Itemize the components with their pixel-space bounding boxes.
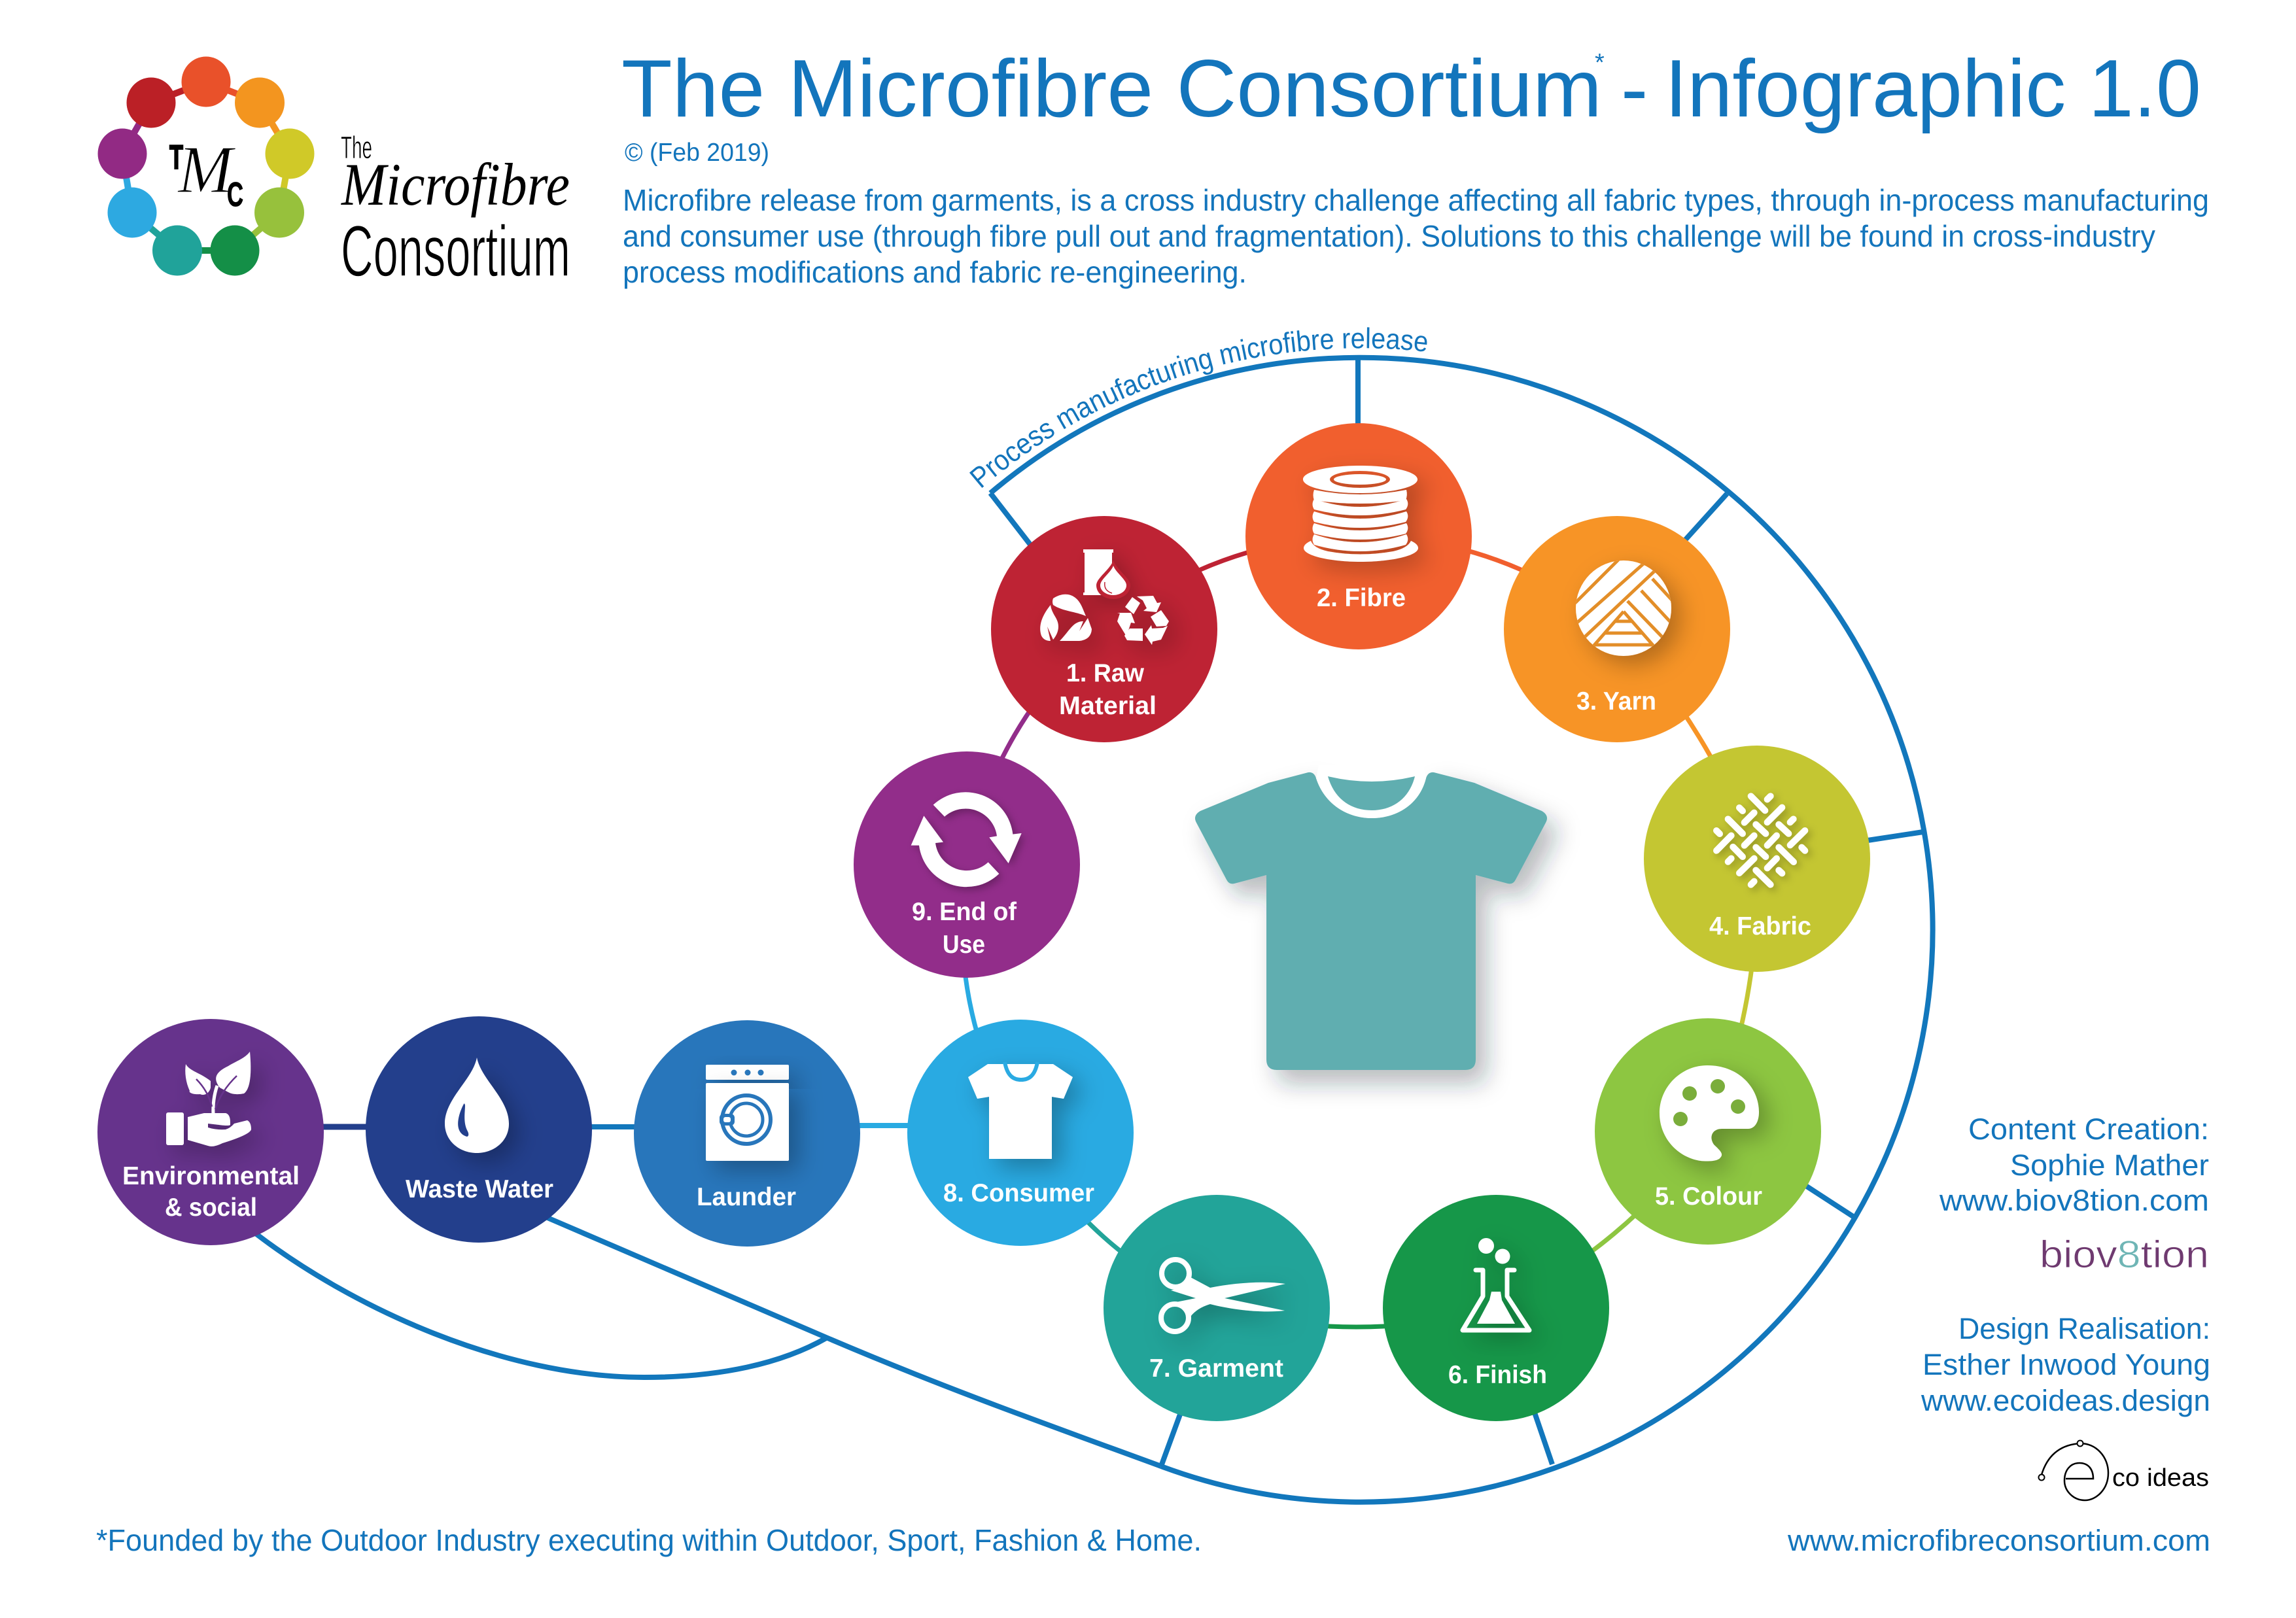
credits: content creation: Content Creation: — [1968, 1112, 2209, 1146]
label: & social — [165, 1194, 257, 1222]
label: 8. Consumer — [943, 1179, 1094, 1207]
title: * — [1595, 49, 1605, 77]
website: www.microfibreconsortium.com — [1787, 1524, 2210, 1557]
logo: wordmark: Microfibre — [340, 151, 570, 218]
icon: barrel, leaves and recycling — [1040, 549, 1169, 645]
credits: content creation: www.biov8tion.com — [1939, 1184, 2209, 1217]
logo: TMC ring: C — [227, 176, 243, 214]
credits: design realisation: www.ecoideas.design — [1921, 1384, 2210, 1417]
logo: biov8tion: biov8tion — [2040, 1233, 2209, 1276]
icon: flask — [1463, 1238, 1529, 1330]
ring connectors — [211, 536, 1758, 1327]
step 1: raw material — [991, 516, 1217, 742]
step 8: consumer — [907, 1020, 1134, 1246]
logo: TMC ring: T — [169, 139, 183, 177]
step 2: fibre — [1245, 423, 1472, 649]
label: 6. Finish — [1448, 1361, 1547, 1389]
step 7: garment — [1104, 1195, 1330, 1421]
credits: design realisation — [1921, 1312, 2210, 1417]
title — [621, 44, 2201, 134]
credits: design realisation: Esther Inwood Young — [1922, 1348, 2210, 1381]
title: - — [1621, 44, 1648, 134]
label: 4. Fabric — [1709, 912, 1811, 940]
icon: palette — [1660, 1065, 1759, 1161]
consumer-side curves — [256, 1218, 1161, 1466]
waste water — [366, 1016, 592, 1243]
central t-shirt — [1195, 765, 1547, 1070]
step 4: fabric — [1644, 746, 1870, 972]
outer arc: process manufacturing boundary — [990, 358, 1933, 1502]
icon: water drop — [445, 1058, 509, 1153]
label: 7. Garment — [1149, 1354, 1283, 1383]
label: Launder — [697, 1183, 796, 1211]
icon: woven fabric — [1716, 796, 1805, 885]
credits: content creation — [1939, 1112, 2209, 1217]
logo: eco ideas — [2038, 1440, 2209, 1500]
icon: t-shirt — [968, 1062, 1073, 1159]
footnote: *Founded by the Outdoor Industry executing within Outdoor, Sport, Fashion & Home. — [96, 1523, 1202, 1557]
logo: wordmark: The — [341, 131, 372, 165]
logo: wordmark: Consortium — [341, 211, 570, 292]
intro text: process modifications and fabric re-engineering. — [623, 255, 1247, 289]
label: Environmental — [122, 1162, 300, 1190]
icon: plant in hand — [166, 1052, 251, 1146]
label: 5. Colour — [1655, 1182, 1762, 1211]
label: 2. Fibre — [1317, 584, 1406, 612]
icon: spool — [1303, 466, 1418, 562]
date: © (Feb 2019) — [625, 139, 769, 167]
environmental and social — [97, 1019, 324, 1245]
icon: ball of yarn — [1571, 555, 1675, 656]
title: The Microfibre Consortium — [621, 44, 1602, 134]
logo: eco ideas: co ideas — [2112, 1464, 2209, 1492]
title: Infographic 1.0 — [1665, 44, 2201, 134]
launder — [634, 1020, 860, 1247]
logo: TMC ring — [98, 56, 314, 276]
label: Material — [1059, 692, 1157, 720]
arc label: Process manufacturing microfibre release — [969, 327, 1427, 488]
intro text: Microfibre release from garments, is a cross industry challenge affecting all fabric types, through in-process manufacturing — [623, 183, 2209, 217]
intro text: and consumer use (through fibre pull out and fragmentation). Solutions to this challenge will be found in cross-industry — [623, 219, 2155, 253]
label — [1059, 659, 1157, 720]
step 9: end of use — [854, 751, 1080, 978]
logo: wordmark — [340, 131, 570, 292]
label — [912, 898, 1017, 959]
step 5: colour — [1595, 1018, 1821, 1245]
step 6: finish — [1383, 1195, 1609, 1421]
step 3: yarn — [1504, 516, 1730, 742]
icon: scissors — [1161, 1260, 1285, 1332]
label: Waste Water — [406, 1175, 553, 1203]
icon: washing machine — [706, 1065, 789, 1161]
label: 9. End of — [912, 898, 1017, 926]
intro text — [623, 183, 2209, 289]
label: 1. Raw — [1066, 659, 1145, 687]
credits: content creation: Sophie Mather — [2010, 1148, 2209, 1182]
credits: design realisation: Design Realisation: — [1958, 1312, 2210, 1345]
label: 3. Yarn — [1576, 687, 1656, 715]
label — [122, 1162, 300, 1222]
icon: cycle arrows — [911, 792, 1022, 887]
logo: TMC ring: M — [177, 132, 236, 207]
label: Use — [943, 931, 985, 959]
